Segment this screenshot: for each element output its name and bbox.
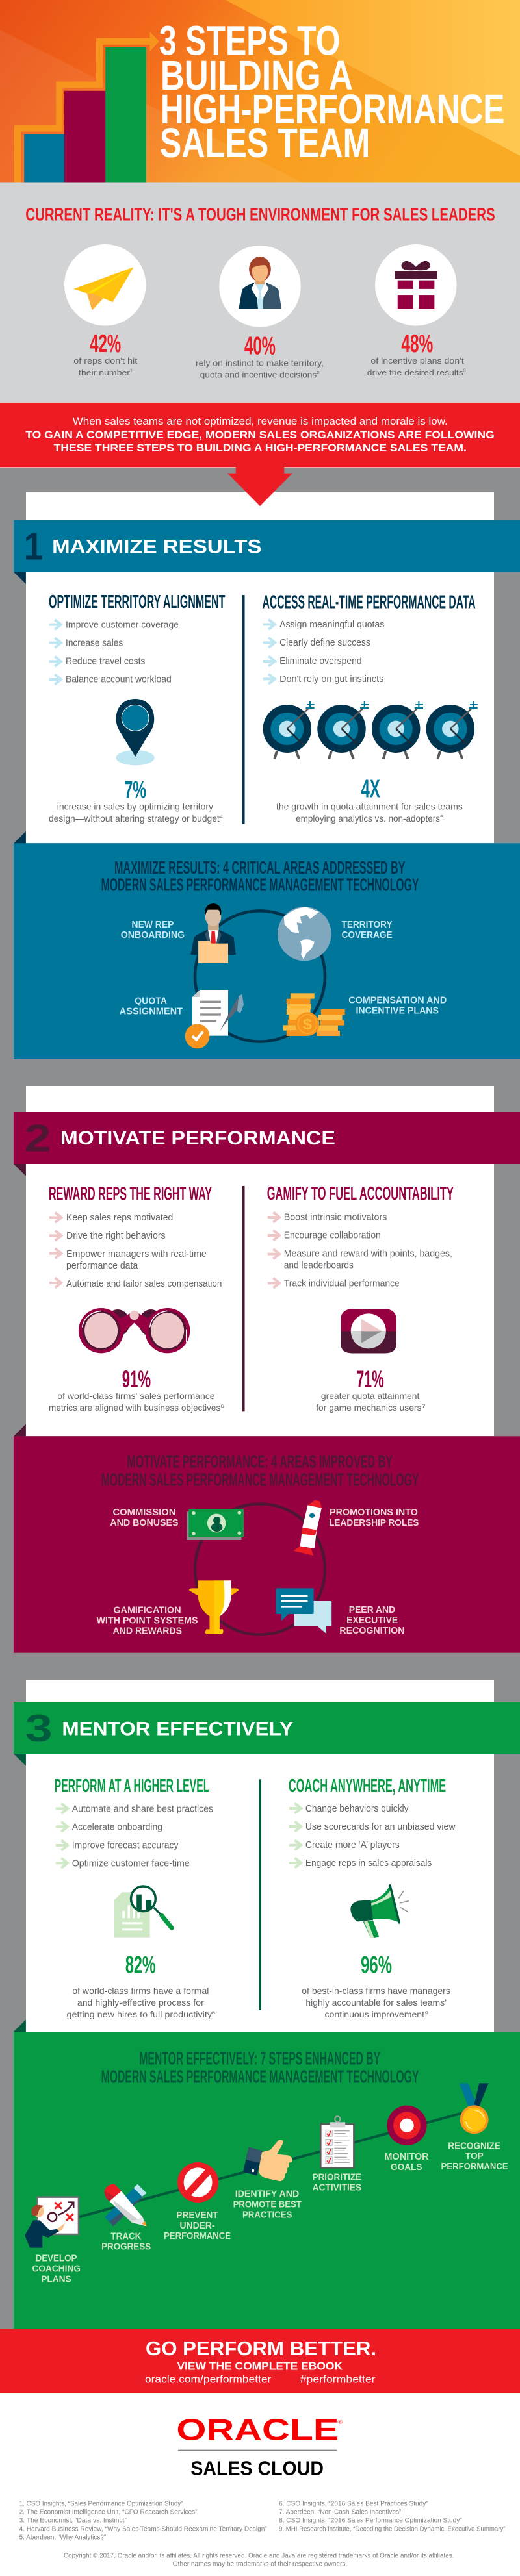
stat: 91 percent: [49, 1367, 224, 1413]
label: prevent under-performance: PERFORMANCE: [164, 2231, 231, 2241]
icon: businesswoman: [219, 246, 301, 327]
footer block: [0, 2329, 520, 2568]
title: BUILDING A: [161, 52, 353, 99]
stat: 7 percent: 7%: [124, 777, 146, 803]
panel: maximize results critical areas: [14, 831, 520, 1059]
list: reward benefits: performance data: [66, 1261, 138, 1271]
banner: maximize results: MAXIMIZE RESULTS: [52, 536, 262, 558]
label: prevent under-performance: PREVENT: [176, 2210, 218, 2221]
footnotes: [20, 2499, 506, 2541]
label: territory coverage: [342, 920, 393, 941]
icon: banknote: [187, 1509, 244, 1540]
icon: medal: [460, 2083, 489, 2134]
list: territory benefits: [49, 620, 179, 685]
label: recognize top performance: TOP: [465, 2151, 484, 2162]
icon: report under magnifying glass: [114, 1886, 172, 1938]
icon: coach at board: [25, 2197, 79, 2248]
stat: 4X: 4X: [361, 775, 380, 803]
stat: 96 percent: highly accountable for sales teams’: [306, 1998, 447, 2008]
stat: 4X: employing analytics vs. non-adopters: [296, 814, 440, 824]
panel: current reality: [0, 183, 520, 403]
icon: trophy: [189, 1580, 239, 1634]
icon: binoculars: [79, 1308, 190, 1353]
list: analytics benefits: Don't rely on gut instincts: [280, 674, 384, 685]
list: gamification benefits: and leaderboards: [284, 1260, 354, 1271]
stat: 48 percent: 48%: [401, 330, 433, 358]
stat: 91 percent: of world-class firms' sales performance: [57, 1391, 215, 1401]
banner: motivate performance: 2: [25, 1117, 51, 1160]
label: commission and bonuses: COMMISSION: [112, 1508, 176, 1518]
call to action: oracle.com/performbetter: [145, 2373, 271, 2385]
stat: 96 percent: continuous improvement: [324, 2010, 424, 2019]
footnotes: 6. CSO Insights, “2016 Sales Best Practices Study”: [279, 2499, 428, 2507]
list: coaching benefits: Change behaviors quickly: [306, 1804, 409, 1814]
icon: speech bubbles: [276, 1588, 332, 1634]
label: promotions into leadership roles: [329, 1508, 419, 1528]
label: peer and executive recognition: EXECUTIVE: [346, 1615, 398, 1626]
list: reward benefits: Keep sales reps motivated: [66, 1213, 173, 1223]
icon: ruler and pencil: [105, 2184, 147, 2227]
divider: [242, 595, 245, 824]
stat: 91 percent: metrics are aligned with business objectives: [49, 1403, 220, 1413]
copyright: Other names may be trademarks of their respective owners.: [173, 2560, 347, 2568]
label: recognize top performance: [441, 2141, 508, 2172]
logo: oracle sales cloud: ®: [337, 2419, 343, 2425]
label: identify and promote best practices: [233, 2189, 302, 2220]
list: gamification benefits: Track individual performance: [284, 1278, 400, 1289]
stat: 42 percent: their number: [79, 368, 131, 377]
ring diagram: [195, 911, 325, 1042]
panel: red call to attention: TO GAIN A COMPETITIVE EDGE, MODERN SALES ORGANIZATIONS ARE FOLLOWING: [25, 429, 495, 441]
icon: game play button: [341, 1309, 396, 1353]
stat: 91 percent: 6: [220, 1404, 224, 1409]
stat: 96 percent: 96%: [361, 1952, 392, 1978]
list: territory benefits: Increase sales: [66, 638, 123, 649]
stat: 4X: [276, 775, 463, 824]
list: analytics benefits: Clearly define success: [280, 638, 370, 648]
stat: 82 percent: and highly-effective process for: [77, 1998, 204, 2008]
icon: rising bar chart with arrow: [18, 32, 159, 183]
label: gamification: AND REWARDS: [112, 1626, 182, 1636]
label: territory coverage: TERRITORY: [342, 920, 393, 930]
logo: oracle sales cloud: [176, 2413, 343, 2480]
call to action: [0, 2329, 520, 2393]
label: track progress: TRACK: [110, 2231, 142, 2241]
stat: 48 percent: [367, 330, 466, 377]
stat: 71 percent: greater quota attainment: [321, 1391, 419, 1401]
stat: 71 percent: 7: [422, 1404, 426, 1409]
list: gamification benefits: Encourage collaboration: [284, 1230, 381, 1241]
list: gamification benefits: Boost intrinsic motivators: [284, 1212, 387, 1223]
stat: 48 percent: drive the desired results: [367, 368, 463, 377]
main grey background: [0, 468, 520, 2329]
label: prioritize activities: PRIORITIZE: [313, 2172, 361, 2183]
label: compensation and incentive plans: INCENTIVE PLANS: [356, 1005, 439, 1017]
arrow: down into steps: [228, 467, 292, 506]
list: coaching benefits: Engage reps in sales appraisals: [306, 1858, 432, 1869]
stat: 71 percent: [316, 1367, 426, 1413]
icon: four archery targets: [263, 701, 478, 759]
divider: [259, 1779, 261, 2010]
title: [159, 18, 505, 166]
stat: 4X: 5: [440, 814, 444, 820]
label: develop coaching plans: [32, 2253, 81, 2285]
label: prevent under-performance: [164, 2210, 231, 2241]
icon: rocket: [294, 1500, 322, 1556]
banner: maximize results: 1: [24, 525, 43, 568]
list: reward benefits: Drive the right behaviors: [66, 1231, 166, 1241]
panel: step 2 motivate performance: [14, 1086, 520, 1436]
label: new rep onboarding: NEW REP: [132, 920, 174, 930]
banner: motivate performance: MOTIVATE PERFORMANCE: [60, 1128, 335, 1149]
label: promotions into leadership roles: LEADERSHIP ROLES: [329, 1518, 419, 1528]
footnotes: 2. The Economist Intelligence Unit, “CFO Research Services”: [20, 2508, 198, 2516]
label: develop coaching plans: DEVELOP: [36, 2253, 77, 2264]
call to action: GO PERFORM BETTER.: [146, 2338, 376, 2360]
stat: 48 percent: of incentive plans don't: [370, 356, 464, 366]
stat: 7 percent: increase in sales by optimizing territory: [57, 802, 213, 812]
stat: 96 percent: [302, 1952, 450, 2019]
label: prevent under-performance: UNDER-: [180, 2221, 215, 2231]
banner: maximize results: [14, 520, 520, 584]
panel: red call to attention: [0, 403, 520, 467]
label: develop coaching plans: PLANS: [41, 2274, 72, 2285]
icon: new rep with folder: [190, 903, 236, 963]
logo: oracle sales cloud: ORACLE: [176, 2413, 339, 2446]
stat: 82 percent: 8: [212, 2010, 215, 2015]
icon: paper plane: [64, 244, 146, 326]
label: peer and executive recognition: PEER AND: [349, 1605, 395, 1615]
panel: step 2 motivate performance: REWARD REPS THE RIGHT WAY: [49, 1183, 212, 1204]
stat: 42 percent: [73, 330, 138, 377]
label: track progress: [101, 2231, 151, 2252]
stat: 71 percent: for game mechanics users: [316, 1403, 421, 1413]
label: monitor goals: MONITOR: [384, 2152, 429, 2162]
label: compensation and incentive plans: [348, 995, 447, 1017]
list: coaching benefits: [289, 1803, 456, 1869]
list: reward benefits: [49, 1213, 222, 1289]
label: develop coaching plans: COACHING: [32, 2264, 81, 2275]
footnotes: 7. Aberdeen, “Non-Cash-Sales Incentives”: [279, 2508, 401, 2516]
label: track progress: PROGRESS: [101, 2241, 151, 2252]
call to action: VIEW THE COMPLETE EBOOK: [177, 2360, 343, 2372]
stat: 42 percent: of reps don't hit: [73, 356, 138, 366]
stat: 7 percent: 4: [219, 814, 223, 820]
header banner: [0, 0, 520, 183]
list: performance benefits: Optimize customer face-time: [72, 1858, 190, 1869]
divider: [242, 1186, 245, 1411]
heading: 4 critical areas: [101, 857, 419, 895]
label: quota assignment: QUOTA: [135, 996, 167, 1006]
icon: globe: [278, 907, 332, 961]
label: commission and bonuses: AND BONUSES: [110, 1518, 178, 1528]
list: territory benefits: Improve customer coverage: [66, 620, 179, 631]
footnotes: 4. Harvard Business Review, “Why Sales Teams Should Reexamine Territory Design”: [20, 2525, 267, 2532]
stat: 42 percent: 42%: [90, 330, 121, 358]
panel: step 3 mentor effectively: PERFORM AT A HIGHER LEVEL: [55, 1775, 209, 1796]
banner: mentor effectively: MENTOR EFFECTIVELY: [62, 1718, 293, 1739]
label: prioritize activities: ACTIVITIES: [313, 2182, 361, 2193]
call to action: #performbetter: [300, 2373, 376, 2385]
icon: clipboard checklist: [320, 2116, 354, 2167]
icon: map pin: [116, 699, 155, 765]
list: analytics benefits: Assign meaningful quotas: [280, 620, 384, 630]
label: identify and promote best practices: PRACTICES: [242, 2210, 292, 2220]
stat: 40 percent: 40%: [244, 332, 276, 360]
icon: gift box: [375, 244, 457, 326]
label: quota assignment: [120, 996, 183, 1017]
stat: 40 percent: rely on instinct to make territory,: [196, 358, 324, 368]
icon: coin stacks: $: [303, 1017, 312, 1033]
label: new rep onboarding: ONBOARDING: [121, 930, 185, 941]
list: reward benefits: Automate and tailor sales compensation: [66, 1279, 222, 1289]
footnotes: 1. CSO Insights, “Sales Performance Optimization Study”: [20, 2499, 183, 2507]
list: territory benefits: Balance account workload: [66, 674, 172, 685]
title: SALES TEAM: [160, 120, 370, 166]
label: peer and executive recognition: [339, 1605, 404, 1636]
list: gamification benefits: [268, 1212, 452, 1289]
label: commission and bonuses: [110, 1508, 178, 1528]
list: analytics benefits: [263, 620, 384, 685]
label: identify and promote best practices: PROMOTE BEST: [233, 2199, 302, 2210]
banner: mentor effectively: [14, 1702, 520, 1766]
label: gamification: GAMIFICATION: [113, 1605, 181, 1615]
copyright: [64, 2551, 454, 2568]
panel: mentor effectively seven steps: [14, 2019, 520, 2360]
label: new rep onboarding: [121, 920, 185, 941]
stat: 82 percent: of world-class firms have a formal: [72, 1986, 209, 1996]
ring diagram: [195, 1504, 325, 1635]
title: 3 STEPS TO: [159, 18, 340, 64]
banner: motivate performance: [14, 1112, 520, 1176]
list: reward benefits: Empower managers with real-time: [66, 1249, 207, 1259]
heading: 4 areas improved: [101, 1451, 419, 1490]
icon: thumbs up: [243, 2140, 292, 2181]
label: quota assignment: ASSIGNMENT: [120, 1006, 183, 1017]
label: gamification: WITH POINT SYSTEMS: [96, 1615, 198, 1626]
label: peer and executive recognition: RECOGNITION: [339, 1626, 404, 1636]
label: gamification: [96, 1605, 198, 1636]
stat: 40 percent: quota and incentive decisions: [200, 370, 317, 380]
panel: step 1 maximize results: [14, 492, 520, 843]
stat: 48 percent: 3: [463, 368, 466, 373]
list: territory benefits: Reduce travel costs: [66, 656, 145, 667]
rising path line: [79, 2110, 474, 2217]
icon: megaphone: [350, 1886, 409, 1938]
label: identify and promote best practices: IDENTIFY AND: [235, 2189, 299, 2199]
heading: 7 steps enhanced: [101, 2048, 419, 2087]
icon: prohibition sign: [177, 2162, 218, 2203]
panel: motivate performance areas: [14, 1424, 520, 1653]
label: territory coverage: COVERAGE: [342, 930, 393, 941]
list: performance benefits: Automate and share best practices: [72, 1804, 213, 1814]
footnotes: 3. The Economist, “Data vs. Instinct”: [20, 2516, 127, 2524]
panel: red call to attention: THESE THREE STEPS TO BUILDING A HIGH-PERFORMANCE SALES TEAM.: [54, 442, 467, 454]
label: monitor goals: GOALS: [391, 2162, 422, 2173]
list: performance benefits: Improve forecast accuracy: [72, 1840, 179, 1850]
stat: 40 percent: [196, 332, 324, 380]
label: prioritize activities: [313, 2172, 361, 2193]
stat: 7 percent: [49, 777, 223, 824]
list: analytics benefits: Eliminate overspend: [280, 656, 362, 666]
stat: 42 percent: 1: [130, 368, 133, 373]
stat: 7 percent: design—without altering strategy or budget: [49, 814, 220, 824]
stat: 82 percent: [67, 1952, 215, 2019]
stat: 82 percent: getting new hires to full productivity: [67, 2010, 212, 2019]
icon: quota document and pen: [185, 990, 244, 1048]
stat: 96 percent: 9: [425, 2010, 428, 2015]
list: coaching benefits: Create more ‘A’ players: [306, 1840, 400, 1850]
stat: 40 percent: 2: [317, 370, 319, 375]
footnotes: 5. Aberdeen, “Why Analytics?”: [20, 2533, 106, 2541]
list: performance benefits: [56, 1804, 213, 1869]
label: monitor goals: [384, 2152, 429, 2173]
panel: step 3 mentor effectively: [14, 1680, 520, 2032]
stat: 82 percent: 82%: [125, 1952, 156, 1978]
stat: 91 percent: 91%: [122, 1367, 151, 1393]
banner: mentor effectively: 3: [25, 1707, 53, 1750]
panel: red call to attention: When sales teams are not optimized, revenue is impacted and morale is low.: [73, 416, 448, 427]
label: promotions into leadership roles: PROMOTIONS INTO: [330, 1508, 418, 1518]
list: performance benefits: Accelerate onboarding: [72, 1822, 162, 1832]
stat: 71 percent: 71%: [356, 1367, 384, 1393]
icon: coin stacks: [283, 993, 345, 1036]
logo: oracle sales cloud: SALES CLOUD: [190, 2458, 324, 2480]
icon: goal target: [387, 2106, 427, 2145]
label: compensation and incentive plans: COMPENSATION AND: [348, 995, 447, 1006]
